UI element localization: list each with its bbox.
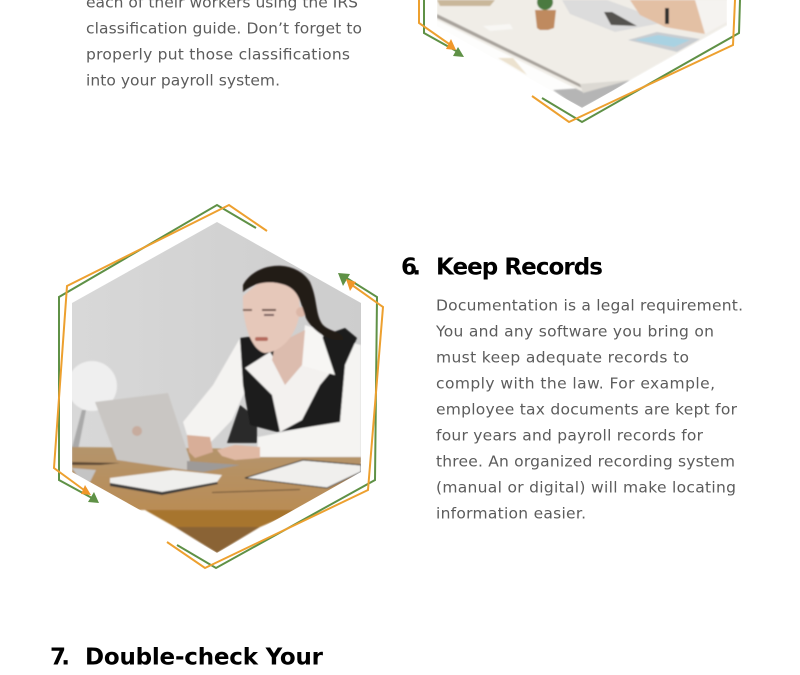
section 6 body text: must keep adequate records to	[436, 348, 689, 366]
section 6 body text: three. An organized recording system	[436, 452, 735, 470]
heading: 6. Keep Records: Keep Records	[436, 254, 603, 280]
heading: 7. Double-check Your: 7.	[50, 644, 70, 670]
section 6 body text: (manual or digital) will make locating	[436, 478, 736, 496]
notebook	[110, 470, 222, 495]
section 6 hexagon photo: woman at laptop	[67, 222, 361, 553]
black vest	[240, 328, 357, 432]
section 5 body text: into your payroll system.	[86, 72, 280, 90]
lamp	[72, 360, 118, 448]
section 6 body text: comply with the law. For example,	[436, 374, 715, 392]
neck and face	[272, 330, 305, 385]
section 6 photo frame: green line with arrow	[59, 205, 377, 568]
section 6 photo frame: orange line with arrow	[54, 205, 383, 568]
heading: 6. Keep Records: 6.	[401, 254, 421, 280]
section 6 body text: Documentation is a legal requirement.	[436, 296, 743, 314]
hair	[243, 266, 343, 340]
section 5 photo frame: green line with arrow	[424, 0, 740, 122]
section 6 body text: You and any software you bring on	[435, 322, 714, 340]
section 6 body text: employee tax documents are kept for	[436, 400, 738, 418]
wooden table	[72, 447, 361, 553]
section 6 body text: information easier.	[436, 504, 586, 522]
section 6 body text	[435, 296, 743, 522]
white blouse and collar	[245, 352, 330, 432]
heading: 7. Double-check Your: Double-check Your	[85, 644, 324, 670]
section 5 body text: classification guide. Don’t forget to	[86, 20, 362, 38]
section 5 photo frame: orange line with arrow	[419, 0, 735, 122]
laptop	[95, 393, 240, 472]
section 5 body text	[86, 0, 362, 90]
clipboard with papers	[245, 460, 361, 488]
section 5 hexagon photo: office desk	[437, 0, 727, 110]
shirt and arms	[183, 338, 361, 457]
section 6 body text: four years and payroll records for	[436, 426, 704, 444]
section 5 body text: properly put those classifications	[86, 46, 350, 64]
hands	[187, 435, 260, 460]
